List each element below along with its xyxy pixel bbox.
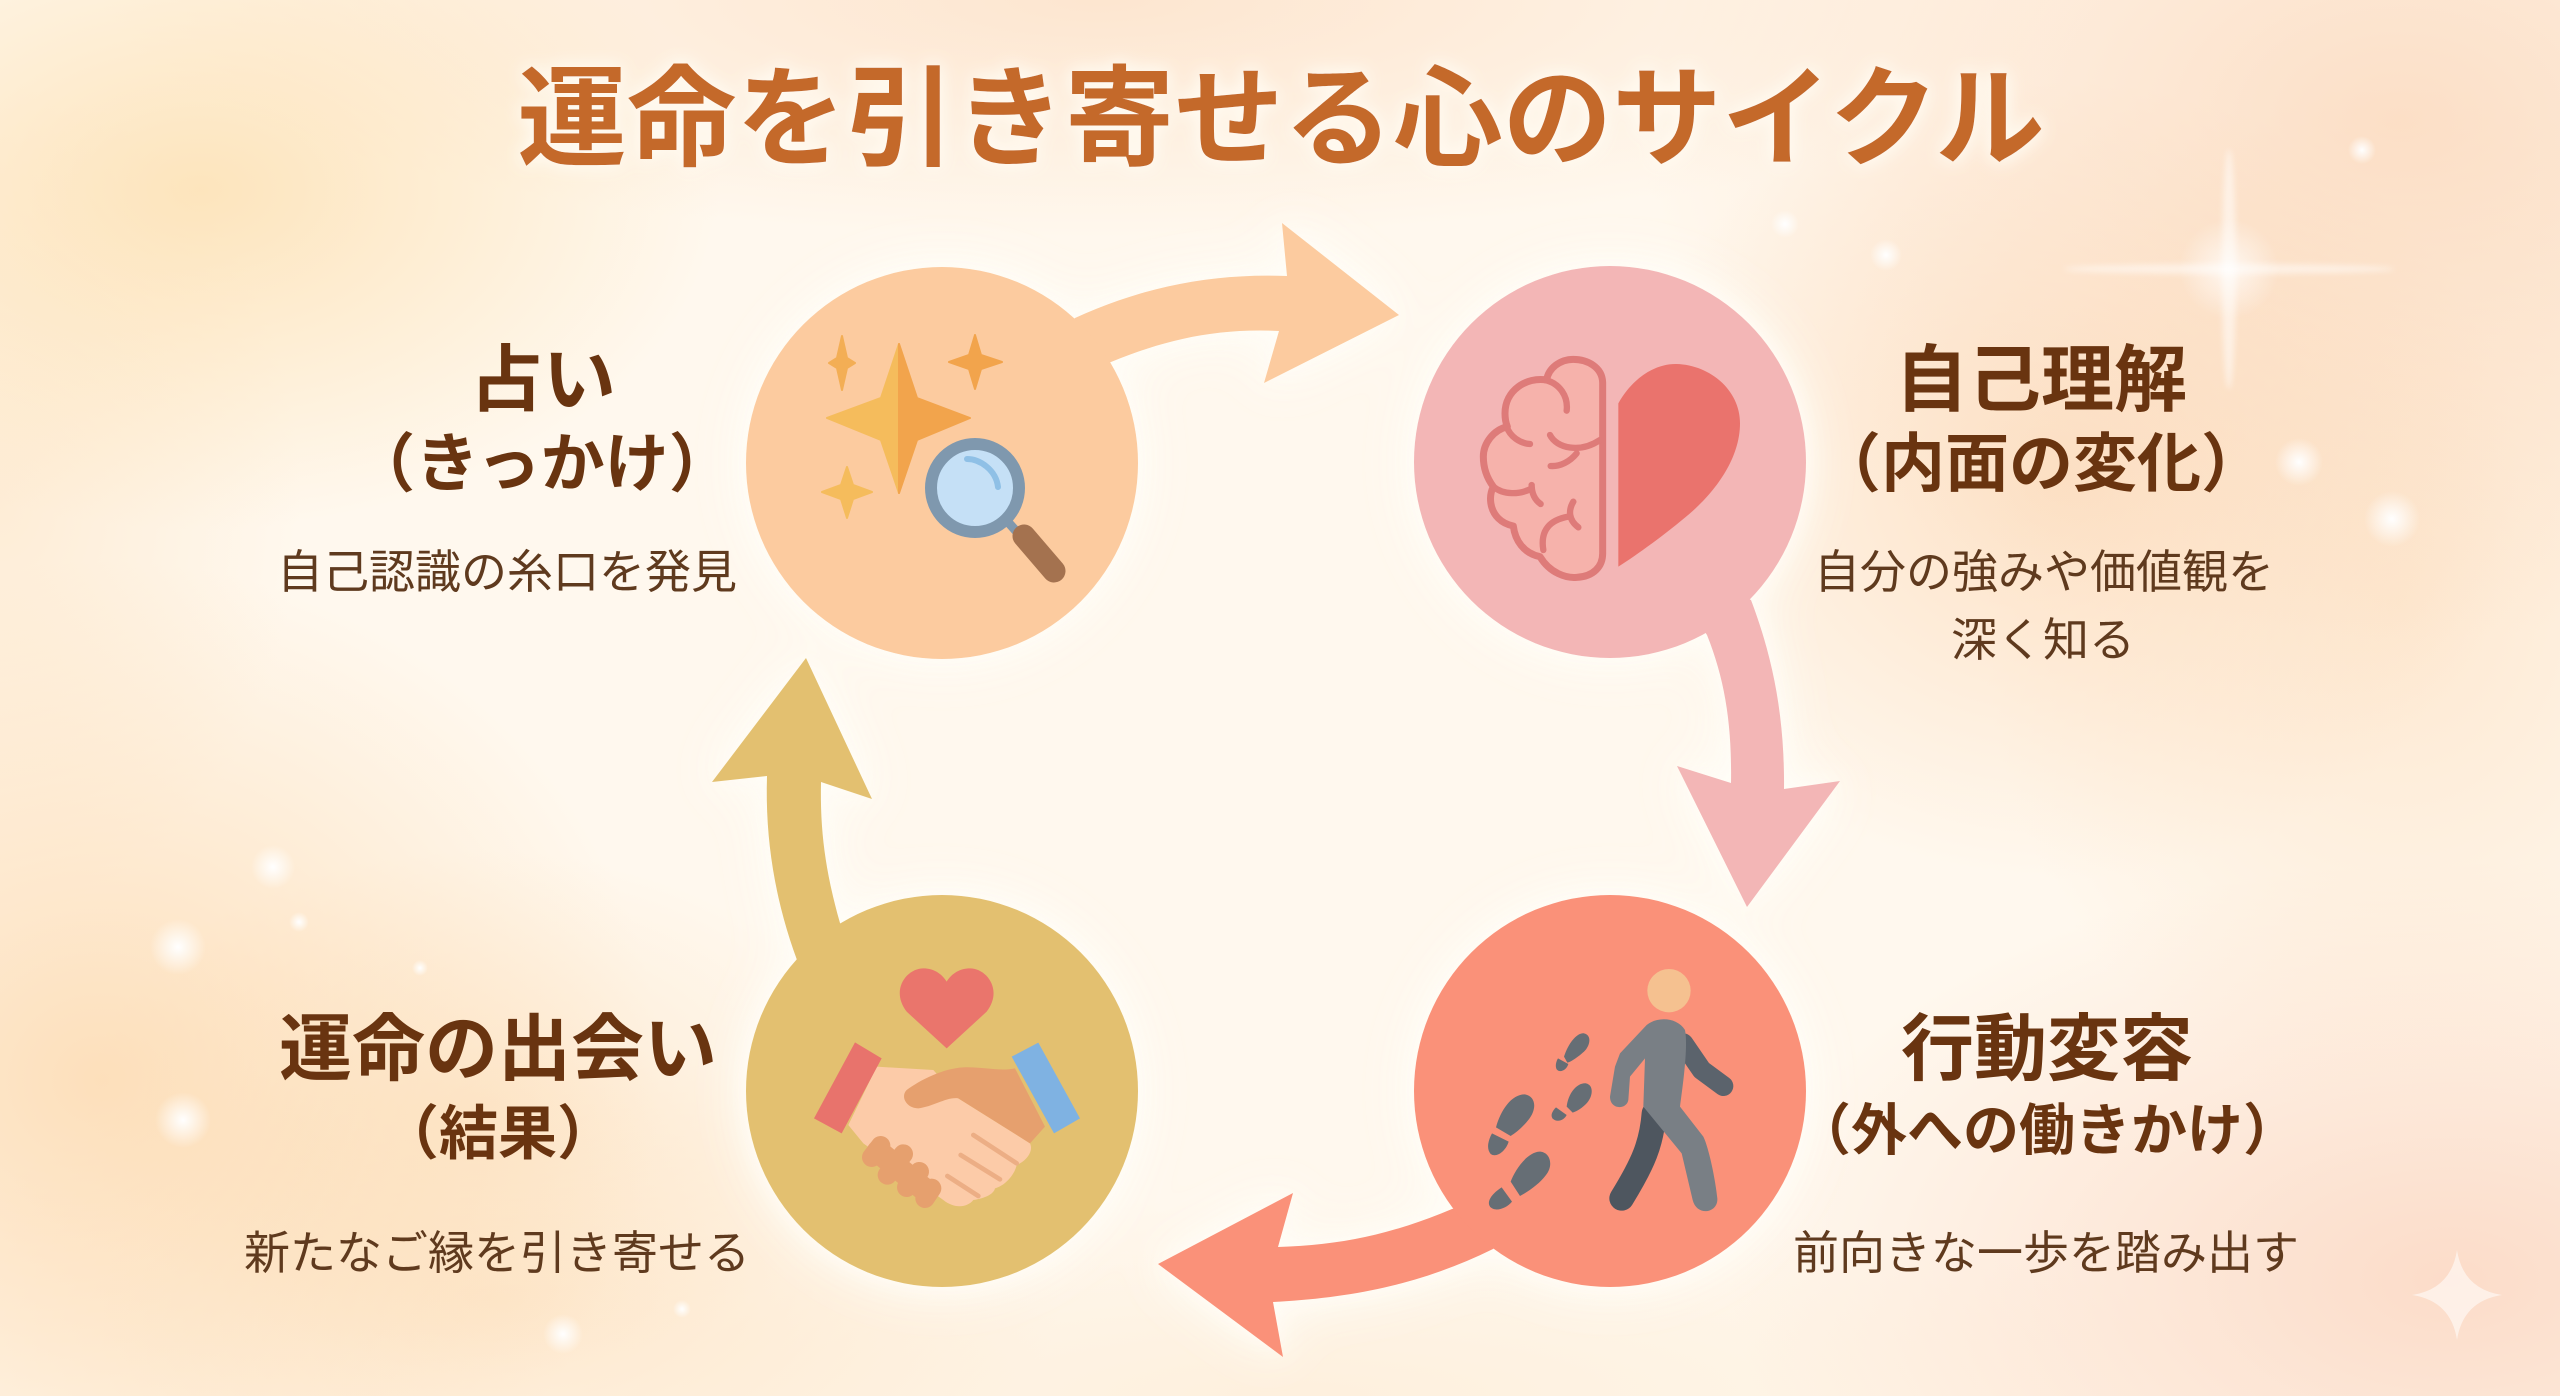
text block: behavior change	[1793, 1009, 2299, 1279]
subheading: result: （結果）	[380, 1101, 616, 1167]
arrow: destined encounter to fortune	[712, 658, 900, 1000]
arrow: self understanding to behavior change	[1650, 550, 1840, 907]
icon: half brain and half heart	[1483, 359, 1740, 577]
description: behavior change: 前向きな一歩を踏み出す	[1793, 1227, 2299, 1279]
description: fortune: 自己認識の糸口を発見	[277, 546, 737, 598]
circle: destined encounter	[746, 895, 1138, 1287]
arrow: fortune to self understanding	[1000, 223, 1399, 400]
subheading: inner change: （内面の変化）	[1817, 428, 2265, 500]
cycle shapes: circles and arrows	[712, 223, 1840, 1357]
circle: self understanding	[1414, 266, 1806, 658]
heading: self understanding: 自己理解	[1895, 340, 2187, 421]
icon: sparkles and magnifying glass	[822, 335, 1054, 571]
description: destined encounter: 新たなご縁を引き寄せる	[244, 1227, 750, 1279]
icon: walking person with footprints	[1488, 969, 1723, 1211]
heading: fortune: 占い	[470, 340, 616, 421]
icon: handshake with heart	[814, 968, 1080, 1206]
title: 運命を引き寄せる心のサイクル	[517, 59, 2045, 181]
circle: behavior change	[1414, 895, 1806, 1287]
text block: destined encounter	[244, 1009, 750, 1279]
text block: fortune	[277, 340, 737, 598]
arrow: behavior change to destined encounter	[1158, 1180, 1560, 1357]
description: self understanding: 自分の強みや価値観を	[1814, 546, 2274, 598]
heading: destined encounter: 運命の出会い	[279, 1009, 717, 1090]
description: second line: 深く知る	[1951, 614, 2135, 666]
circle: fortune	[746, 267, 1138, 659]
heading: behavior change: 行動変容	[1901, 1009, 2193, 1090]
subheading: outward action: （外への働きかけ）	[1795, 1099, 2299, 1162]
text block: self understanding	[1814, 340, 2274, 666]
subheading: trigger: （きっかけ）	[351, 428, 733, 500]
